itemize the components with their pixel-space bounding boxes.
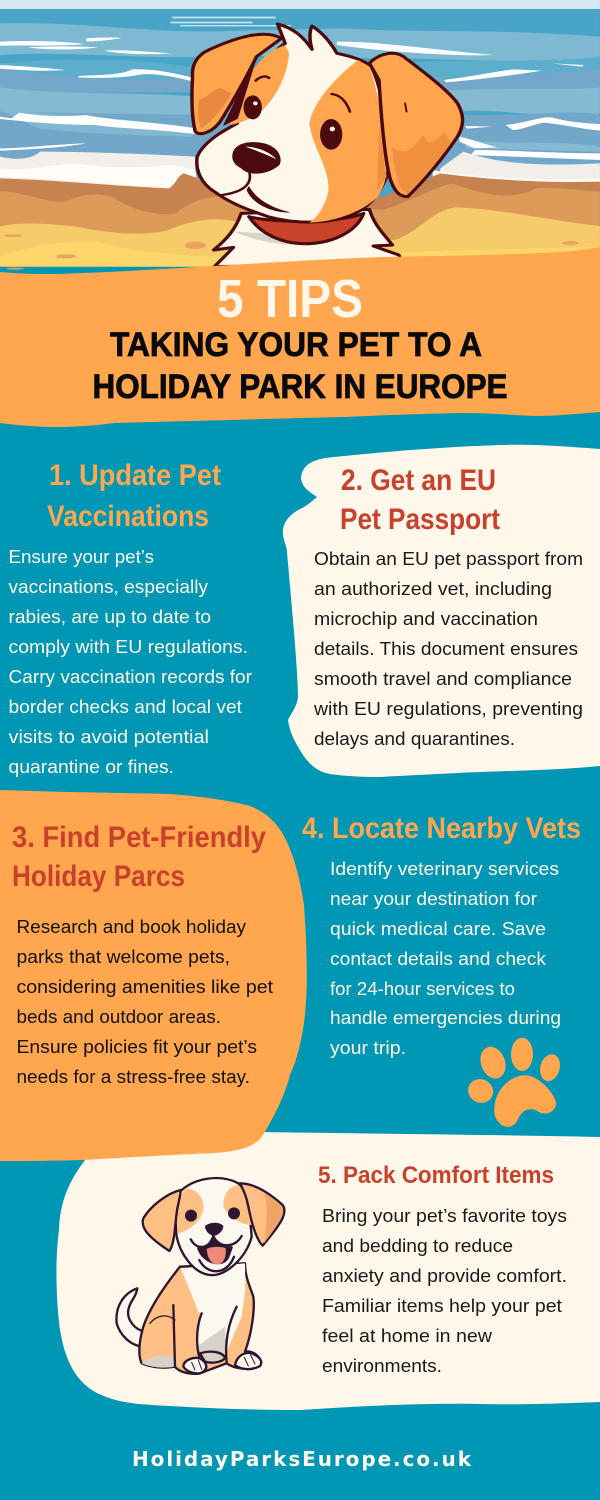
panel: tip 5 pack comfort items (116, 1162, 567, 1376)
body tip 3 (16, 916, 273, 1087)
body tip 1: Carry vaccination records for (8, 666, 252, 687)
hero: beach scene with dog (0, 0, 600, 270)
body tip 4 (330, 858, 561, 1058)
body tip 2: an authorized vet, including (314, 578, 552, 599)
heading tip 3: 3. Find Pet-Friendly (12, 821, 266, 854)
body tip 3: needs for a stress-free stay. (16, 1066, 250, 1087)
body tip 4: your trip. (330, 1037, 406, 1058)
heading tip 2: 2. Get an EU (341, 464, 496, 497)
body tip 4: near your destination for (330, 888, 537, 909)
icon: paw print (464, 1038, 563, 1127)
body tip 3: Research and book holiday (16, 916, 247, 937)
body tip 1 (8, 546, 252, 777)
footer website: HolidayParksEurope.co.uk (132, 1447, 472, 1471)
body tip 1: visits to avoid potential (8, 726, 209, 747)
body tip 5: Familiar items help your pet (322, 1295, 562, 1316)
body tip 5: feel at home in new (322, 1325, 493, 1346)
body tip 1: quarantine or fines. (8, 756, 174, 777)
heading tip 2: Pet Passport (340, 503, 500, 536)
body tip 1: vaccinations, especially (8, 576, 209, 597)
body tip 2: with EU regulations, preventing (313, 698, 583, 719)
body tip 1: Ensure your pet’s (8, 546, 154, 567)
heading tip 2 (340, 464, 500, 536)
body tip 4: quick medical care. Save (330, 918, 546, 939)
body tip 5 (322, 1205, 567, 1376)
body tip 4: Identify veterinary services (330, 858, 559, 879)
title: 5 tips: 5 TIPS (217, 269, 363, 329)
body tip 2: smooth travel and compliance (314, 668, 572, 689)
body tip 1: border checks and local vet (8, 696, 242, 717)
heading tip 1: 1. Update Pet (49, 459, 221, 492)
body tip 2: Obtain an EU pet passport from (314, 548, 583, 569)
heading tip 3: Holiday Parcs (12, 860, 185, 893)
title line 2: HOLIDAY PARK IN EUROPE (92, 368, 508, 406)
body tip 4: for 24-hour services to (330, 978, 515, 999)
panel: tip 4 locate nearby vets (302, 812, 581, 1127)
body tip 5: environments. (322, 1355, 442, 1376)
body tip 1: rabies, are up to date to (8, 606, 211, 627)
body tip 2 (313, 548, 583, 749)
body tip 5: Bring your pet’s favorite toys (322, 1205, 567, 1226)
body tip 3: Ensure policies fit your pet’s (16, 1036, 257, 1057)
panel: tip 2 eu pet passport (283, 445, 600, 777)
body tip 2: microchip and vaccination (314, 608, 538, 629)
heading tip 1: Vaccinations (47, 500, 209, 533)
body tip 2: details. This document ensures (314, 638, 578, 659)
body tip 5: and bedding to reduce (322, 1235, 513, 1256)
body tip 4: contact details and check (330, 948, 547, 969)
heading tip 1 (47, 459, 221, 533)
icon: sitting puppy (116, 1178, 284, 1374)
body tip 1: comply with EU regulations. (8, 636, 248, 657)
panel: tip 3 pet friendly parcs (0, 790, 307, 1161)
body tip 4: handle emergencies during (330, 1007, 561, 1028)
body tip 2: delays and quarantines. (314, 728, 515, 749)
title banner (0, 247, 600, 427)
heading tip 5: 5. Pack Comfort Items (318, 1162, 554, 1189)
body tip 3: beds and outdoor areas. (16, 1006, 221, 1027)
body tip 3: parks that welcome pets, (16, 946, 230, 967)
body tip 3: considering amenities like pet (16, 976, 273, 997)
panel: tip 5 background shape (56, 1132, 600, 1410)
heading tip 3 (12, 821, 266, 893)
body tip 5: anxiety and provide comfort. (322, 1265, 567, 1286)
title line 1: TAKING YOUR PET TO A (110, 326, 482, 364)
panel: tip 1 update vaccinations (8, 459, 252, 777)
